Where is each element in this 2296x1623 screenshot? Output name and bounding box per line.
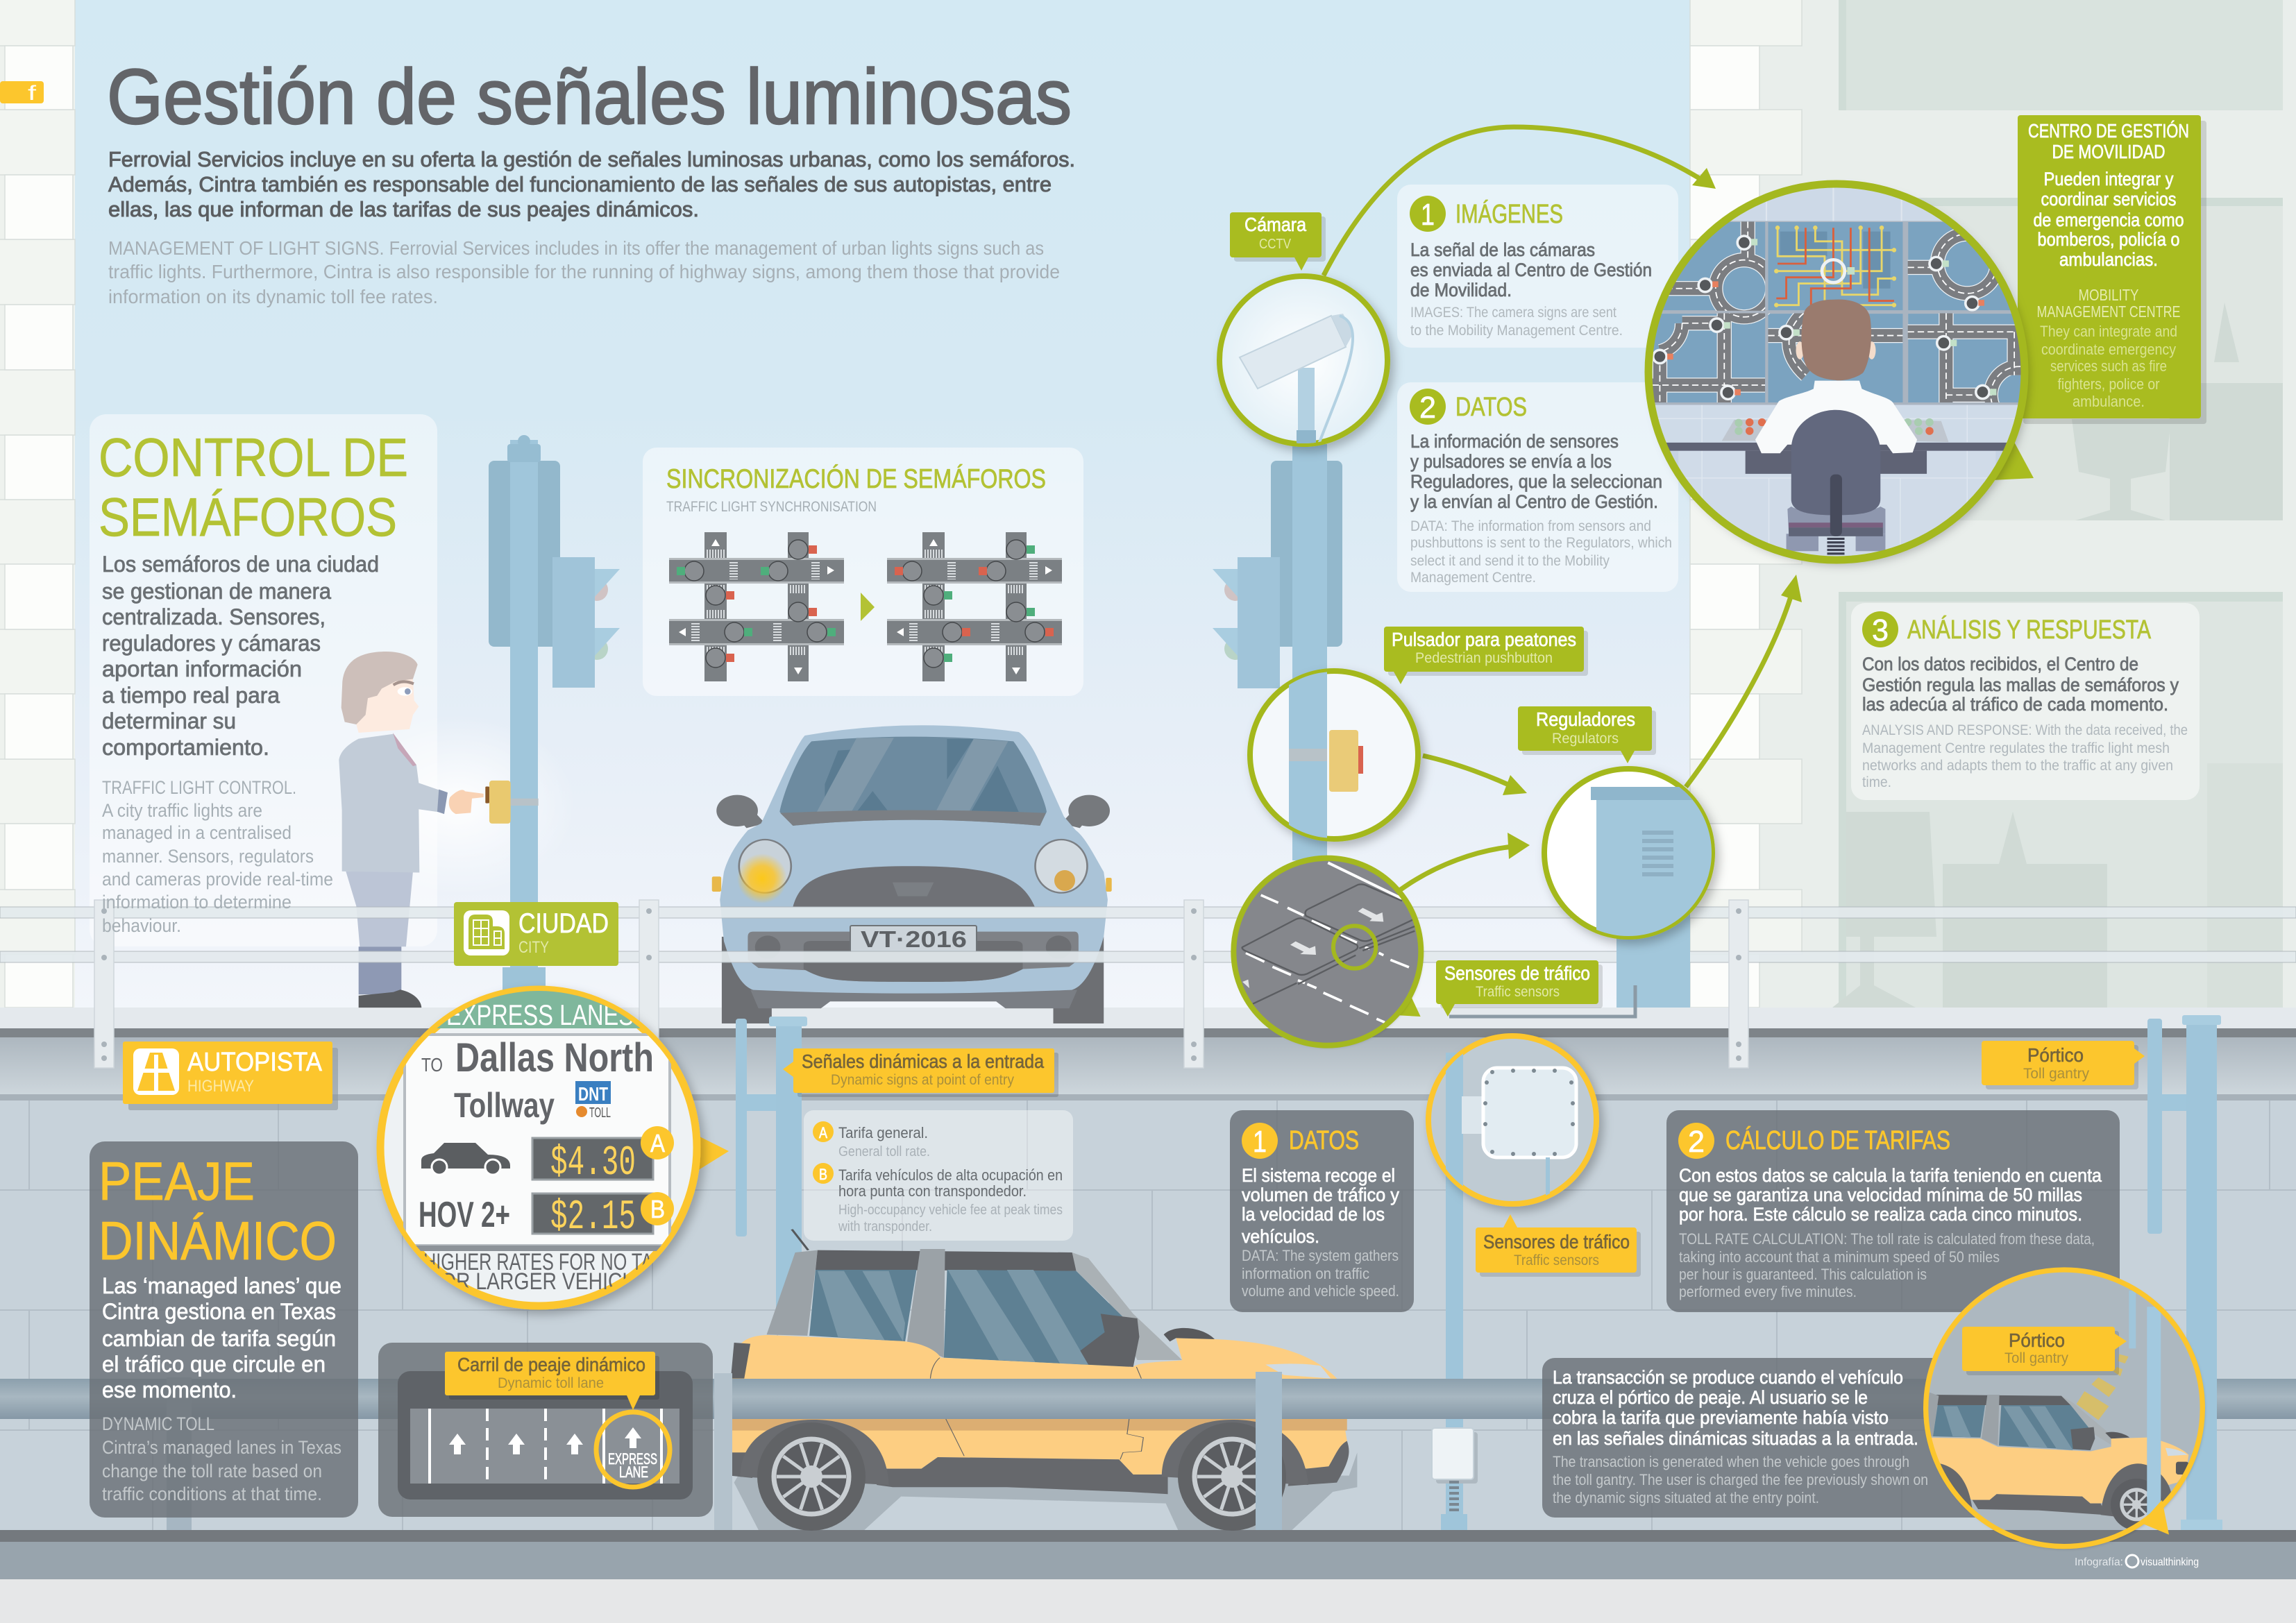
callout: express lane: LANE xyxy=(619,1463,648,1481)
text: control English: manner. Sensors, regulators xyxy=(102,846,314,867)
intro English: information on its dynamic toll fee rates. xyxy=(108,286,438,307)
intro English: traffic lights. Furthermore, Cintra is also responsible for the running of highway signs, among them those that provide xyxy=(108,261,1060,282)
arrow: regulators to centre xyxy=(1686,575,1802,787)
text: análisis Spanish: las adecúa al tráfico de cada momento. xyxy=(1862,694,2168,715)
panel: centro de gestión de movilidad: MANAGEMENT CENTRE xyxy=(2036,303,2181,321)
label: pórtico top: Pórtico xyxy=(2027,1044,2084,1066)
callout: express lane: EXPRESS xyxy=(608,1450,657,1468)
panel: sincronización xyxy=(643,448,1083,696)
panel: carril de peaje dinámico xyxy=(378,1343,713,1517)
label: reguladores: Regulators xyxy=(1552,731,1619,747)
text: cálculo Spanish: por hora. Este cálculo se realiza cada cinco minutos. xyxy=(1679,1204,2082,1225)
text: peaje English: Cintra’s managed lanes in Texas xyxy=(102,1437,341,1458)
callout: road sensors circle xyxy=(1233,858,1421,1046)
text: peaje Spanish: Las ‘managed lanes’ que xyxy=(102,1273,341,1298)
city guard rail xyxy=(0,900,2296,1068)
text: datos highway Spanish: volumen de tráfico y xyxy=(1242,1184,1399,1205)
label: pórtico in circle: Pórtico xyxy=(2009,1329,2065,1351)
label: sensores de tráfico green: Sensores de tráfico xyxy=(1444,962,1590,984)
text: cálculo English xyxy=(1679,1230,2095,1300)
label: pórtico top xyxy=(1982,1041,2145,1089)
text: datos highway English: volume and vehicle speed. xyxy=(1242,1282,1399,1300)
license plate xyxy=(850,926,977,952)
text: transacción English: The transaction is generated when the vehicle goes through xyxy=(1553,1453,1909,1470)
text: peaje Spanish xyxy=(102,1273,341,1402)
panel: 1 datos highway: DATOS xyxy=(1289,1126,1359,1155)
sidewalk and road edge xyxy=(0,1008,2296,1037)
text: peaje English: traffic conditions at that time. xyxy=(102,1484,322,1504)
credit xyxy=(2075,1555,2199,1568)
text: datos Spanish: y pulsadores se envía a los xyxy=(1410,451,1612,472)
panel: 2 datos: DATOS xyxy=(1455,393,1527,422)
text: transacción English: the toll gantry. The user is charged the fee previously shown on xyxy=(1553,1471,1928,1488)
heading: control de semáforos: CONTROL DE xyxy=(99,427,408,488)
operator at desk xyxy=(1755,300,1917,554)
text: cálculo English: per hour is guaranteed. This calculation is xyxy=(1679,1266,1927,1283)
panel: tarifas A B xyxy=(804,1110,1073,1241)
text: datos highway Spanish: vehículos. xyxy=(1242,1226,1319,1247)
number 1 yellow: 1 xyxy=(1253,1125,1267,1159)
callout: pushbutton circle xyxy=(1250,666,1418,847)
text: peaje English: change the toll rate based on xyxy=(102,1461,322,1481)
text: control English xyxy=(102,777,333,936)
text: peaje Spanish: ese momento. xyxy=(102,1377,237,1402)
text: control Spanish xyxy=(102,552,379,760)
panel: centro de gestión de movilidad: fighters, police or xyxy=(2057,375,2160,393)
number 3: 3 xyxy=(1872,613,1889,647)
text: peaje Spanish: Cintra gestiona en Texas xyxy=(102,1299,336,1324)
panel: tarifas A B: Tarifa vehículos de alta ocupación en xyxy=(838,1166,1063,1184)
text: datos Spanish xyxy=(1410,431,1662,512)
panel: centro de gestión de movilidad: ambulancias. xyxy=(2059,249,2158,270)
text: control English: TRAFFIC LIGHT CONTROL. xyxy=(102,777,296,798)
text: análisis English: ANALYSIS AND RESPONSE: With the data received, the xyxy=(1862,722,2188,738)
panel: centro de gestión de movilidad xyxy=(2018,115,2206,424)
callout: dynamic sign lens: $2.15 xyxy=(550,1194,636,1241)
wire from sensors xyxy=(1449,985,1635,1017)
panel: 2 datos xyxy=(1397,382,1678,592)
text: datos English: DATA: The information from sensors and xyxy=(1410,518,1651,534)
marker small B: B xyxy=(819,1166,827,1183)
left brick wall xyxy=(0,0,75,1008)
panel: 3 análisis y respuesta: ANÁLISIS Y RESPUESTA xyxy=(1907,615,2152,645)
panel: 1 datos highway xyxy=(1230,1110,1414,1312)
traffic light right xyxy=(1213,444,1342,860)
number 1 xyxy=(1410,196,1446,232)
road nodes xyxy=(1653,236,1989,399)
text: datos English xyxy=(1410,518,1672,586)
text: transacción English xyxy=(1553,1453,1928,1506)
label: señales dinámicas: Señales dinámicas a la entrada xyxy=(802,1051,1044,1072)
arrow between grids xyxy=(861,593,875,621)
text: datos highway Spanish: la velocidad de los xyxy=(1242,1204,1385,1225)
text: cálculo English: taking into account that a minimum speed of 50 miles xyxy=(1679,1248,2000,1266)
blue car front xyxy=(712,725,1112,1023)
panel: tarifas A B: hora punta con transpondedor. xyxy=(838,1182,1027,1200)
callout: toll gantry circle xyxy=(1923,1269,2214,1554)
panel: centro de gestión de movilidad: MOBILITY xyxy=(2078,286,2139,304)
callout: dynamic sign lens: HIGHER RATES FOR NO TAG xyxy=(423,1249,666,1275)
panel: centro de gestión de movilidad: de emergencia como xyxy=(2034,210,2184,230)
text: control English: A city traffic lights are xyxy=(102,800,262,821)
number 2 yellow: 2 xyxy=(1688,1125,1705,1159)
license plate: VT·2016 xyxy=(861,926,967,952)
background: sky xyxy=(0,0,2296,1020)
callout: dynamic sign lens: OR LARGER VEHICLES xyxy=(441,1268,659,1295)
road grid before xyxy=(669,532,844,681)
text: peaje English: DYNAMIC TOLL xyxy=(102,1413,214,1434)
heading: peaje dinámico: PEAJE xyxy=(99,1150,255,1212)
icon: highway xyxy=(133,1048,179,1095)
heading: peaje dinámico: DINÁMICO xyxy=(99,1210,337,1271)
text: cálculo English: TOLL RATE CALCULATION: The toll rate is calculated from these data, xyxy=(1679,1230,2095,1248)
panel: transacción xyxy=(1542,1358,2021,1518)
heading: peaje dinámico xyxy=(99,1150,337,1271)
text: control Spanish: se gestionan de manera xyxy=(102,579,331,604)
callout: dynamic sign lens: Tollway xyxy=(454,1086,555,1125)
marker B xyxy=(641,1192,674,1225)
label: señales dinámicas: Dynamic signs at point of entry xyxy=(831,1072,1014,1088)
text: imágenes Spanish: de Movilidad. xyxy=(1410,280,1512,300)
text: imágenes Spanish: La señal de las cámaras xyxy=(1410,239,1595,260)
panel: centro de gestión de movilidad: coordinate emergency xyxy=(2041,341,2176,358)
text: análisis English xyxy=(1862,722,2188,790)
text: datos highway English: information on traffic xyxy=(1242,1265,1369,1282)
car wheels xyxy=(757,1422,1286,1531)
label: carril: Dynamic toll lane xyxy=(498,1375,604,1391)
label: pórtico in circle: Toll gantry xyxy=(2004,1350,2068,1366)
panel: centro de gestión de movilidad: They can integrate and xyxy=(2040,323,2177,340)
arrow: camera to centre xyxy=(1324,127,1716,275)
label: sensores de tráfico yellow: Traffic sensors xyxy=(1514,1252,1599,1268)
panel: tarifas A B: Tarifa general. xyxy=(838,1124,928,1141)
text: transacción Spanish: La transacción se produce cuando el vehículo xyxy=(1553,1367,1903,1388)
label: señales dinámicas xyxy=(783,1048,1058,1097)
text: control Spanish: centralizada. Sensores, xyxy=(102,604,326,629)
man pressing button xyxy=(339,652,539,1008)
label: reguladores: Reguladores xyxy=(1536,708,1635,730)
label: cámara xyxy=(1230,212,1326,271)
panel: peaje dinámico xyxy=(90,1141,358,1518)
label: pulsador: Pulsador para peatones xyxy=(1392,629,1576,650)
text: control English: managed in a centralised xyxy=(102,822,292,843)
label: pulsador xyxy=(1384,627,1588,684)
text: cálculo Spanish: Con estos datos se calcula la tarifa teniendo en cuenta xyxy=(1679,1165,2102,1186)
marker small A: A xyxy=(819,1124,827,1141)
callout: dynamic sign lens: HOV 2+ xyxy=(419,1195,510,1235)
label: carril xyxy=(445,1352,659,1410)
monitor screens xyxy=(1650,222,2023,402)
text: peaje English xyxy=(102,1413,341,1504)
text: imágenes English: to the Mobility Management Centre. xyxy=(1410,323,1623,339)
number 2 yellow xyxy=(1678,1123,1714,1159)
intro Spanish: ellas, las que informan de las tarifas de sus peajes dinámicos. xyxy=(108,197,699,221)
text: imágenes English: IMAGES: The camera signs are sent xyxy=(1410,305,1617,321)
callout: dynamic sign lens: TOLL xyxy=(589,1105,611,1121)
text: peaje Spanish: cambian de tarifa según xyxy=(102,1326,336,1351)
label: pórtico in circle xyxy=(1962,1327,2127,1375)
badge: ciudad: CIUDAD xyxy=(518,908,609,939)
badge: autopista xyxy=(123,1042,338,1110)
callout: express lane xyxy=(596,1412,670,1487)
tab: f xyxy=(0,81,44,105)
panel: 2 cálculo de tarifas: CÁLCULO DE TARIFAS xyxy=(1725,1125,1950,1155)
marker small A xyxy=(813,1121,834,1142)
panel: centro de gestión de movilidad: bomberos, policía o xyxy=(2038,229,2179,250)
panel: 1 imágenes xyxy=(1397,185,1678,348)
credit: visualthinking xyxy=(2141,1556,2199,1568)
gantry xyxy=(2147,1015,2222,1530)
callout: dynamic sign lens: TO xyxy=(421,1054,443,1076)
panel: centro de gestión de movilidad: services such as fire xyxy=(2050,357,2167,375)
number 2 xyxy=(1410,389,1446,425)
text: control Spanish: a tiempo real para xyxy=(102,683,280,708)
road grid after xyxy=(887,532,1062,681)
text: control Spanish: determinar su xyxy=(102,708,236,733)
text: datos highway English: DATA: The system gathers xyxy=(1242,1247,1399,1264)
text: control Spanish: comportamiento. xyxy=(102,735,269,760)
label: sensores de tráfico yellow: Sensores de tráfico xyxy=(1483,1231,1630,1252)
intro English: MANAGEMENT OF LIGHT SIGNS. Ferrovial Services includes in its offer the management of urban lights signs such as xyxy=(108,237,1044,259)
text: datos highway Spanish xyxy=(1242,1165,1399,1247)
text: transacción Spanish: en las señales dinámicas situadas a la entrada. xyxy=(1553,1428,1918,1449)
text: datos English: pushbuttons is sent to the Regulators, which xyxy=(1410,535,1672,551)
label: cámara: CCTV xyxy=(1259,237,1292,252)
highway wall xyxy=(0,1037,2296,1531)
panel: centro de gestión de movilidad: ambulance. xyxy=(2073,393,2145,410)
panel text: control de semáforos xyxy=(99,427,408,936)
text: imágenes English xyxy=(1410,305,1623,339)
intro English xyxy=(108,237,1060,307)
callout: dynamic sign lens: $4.30 xyxy=(550,1140,636,1187)
callout: mobility control room xyxy=(1645,184,2048,570)
text: control English: information to determine xyxy=(102,892,292,912)
callout: dynamic sign lens: DNT xyxy=(578,1083,608,1105)
number 1 yellow xyxy=(1242,1123,1278,1159)
text: análisis Spanish xyxy=(1862,654,2179,715)
panel background: control de semáforos xyxy=(90,414,437,946)
text: control English: behaviour. xyxy=(102,915,181,936)
callout: dynamic sign lens xyxy=(375,985,729,1306)
text: datos Spanish: Reguladores, que la seleccionan xyxy=(1410,471,1662,492)
panel: centro de gestión de movilidad: CENTRO DE GESTIÓN xyxy=(2028,120,2189,142)
text: transacción English: the dynamic signs situated at the entry point. xyxy=(1553,1489,1819,1506)
panel: 1 imágenes: IMÁGENES xyxy=(1455,199,1563,229)
callout: regulator circle xyxy=(1544,769,1714,944)
network diagram xyxy=(1776,228,1894,309)
badge: autopista: AUTOPISTA xyxy=(187,1048,323,1077)
text: cálculo Spanish xyxy=(1679,1165,2102,1225)
text: control Spanish: aportan información xyxy=(102,656,302,681)
tab: f: f xyxy=(28,82,37,105)
label: sensores de tráfico green: Traffic sensors xyxy=(1476,984,1560,1000)
text: cálculo Spanish: que se garantiza una velocidad mínima de 50 millas xyxy=(1679,1184,2082,1205)
heading: control de semáforos xyxy=(99,427,408,547)
dynamic sign pole xyxy=(736,1017,807,1331)
marker A xyxy=(641,1126,674,1159)
text: análisis English: time. xyxy=(1862,774,1891,790)
label: sensores de tráfico green xyxy=(1436,960,1603,1017)
number 2: 2 xyxy=(1419,391,1436,425)
marker small B xyxy=(813,1163,834,1184)
panel: sincronización: SINCRONIZACIÓN DE SEMÁFOROS xyxy=(666,464,1046,494)
badge: autopista: HIGHWAY xyxy=(187,1077,254,1096)
heading: control de semáforos: SEMÁFOROS xyxy=(99,486,397,547)
number 3 xyxy=(1862,611,1898,647)
marker A: A xyxy=(650,1129,665,1157)
control console xyxy=(1658,405,2015,545)
intro Spanish: Ferrovial Servicios incluye en su oferta la gestión de señales luminosas urbanas, como los semáforos. xyxy=(108,147,1075,171)
text: transacción Spanish xyxy=(1553,1367,1918,1449)
text: transacción Spanish: cobra la tarifa que previamente había visto xyxy=(1553,1407,1889,1428)
arrow: pushbutton to regulators xyxy=(1423,756,1527,795)
panel: centro de gestión de movilidad: Pueden integrar y xyxy=(2043,169,2174,189)
badge: ciudad xyxy=(454,902,618,966)
icon: car on sign xyxy=(421,1143,510,1175)
text: imágenes Spanish xyxy=(1410,239,1652,300)
text: control English: and cameras provide real-time xyxy=(102,869,333,890)
callout: highway sensor circle xyxy=(1428,1034,1596,1207)
label: cámara: Cámara xyxy=(1244,214,1306,235)
text: datos highway English xyxy=(1242,1247,1399,1300)
callout: dynamic sign lens: EXPRESS LANES xyxy=(446,999,634,1031)
road base xyxy=(0,1530,2296,1623)
traffic light left xyxy=(489,435,620,1008)
badge: ciudad: CITY xyxy=(518,938,549,957)
sensor pole on highway xyxy=(1432,1053,1478,1530)
panel: centro de gestión de movilidad: coordinar servicios xyxy=(2041,189,2177,210)
credit: Infografía: xyxy=(2075,1556,2123,1568)
callout: camera circle xyxy=(1219,276,1387,451)
text: control Spanish: reguladores y cámaras xyxy=(102,631,321,656)
panel: tarifas A B: General toll rate. xyxy=(838,1144,930,1159)
text: transacción Spanish: cruza el pórtico de peaje. Al usuario se le xyxy=(1553,1387,1868,1408)
panel: tarifas A B: High-occupancy vehicle fee at peak times xyxy=(838,1203,1063,1218)
text: análisis English: Management Centre regulates the traffic light mesh xyxy=(1862,740,2170,756)
text: análisis Spanish: Con los datos recibidos, el Centro de xyxy=(1862,654,2138,674)
text: análisis English: networks and adapts them to the traffic at any given xyxy=(1862,758,2173,774)
text: datos English: Management Centre. xyxy=(1410,570,1536,586)
icon: CCTV camera xyxy=(1240,316,1346,389)
label: carril: Carril de peaje dinámico xyxy=(457,1354,645,1375)
label: sensores de tráfico yellow xyxy=(1476,1214,1641,1277)
intro Spanish xyxy=(108,147,1075,221)
text: datos highway Spanish: El sistema recoge el xyxy=(1242,1165,1395,1186)
icon: city building xyxy=(464,910,509,955)
monitor roads xyxy=(1652,221,2021,402)
office silhouettes in windows xyxy=(1832,303,2283,1008)
label: pórtico top: Toll gantry xyxy=(2023,1066,2089,1082)
text: datos English: select it and send it to the Mobility xyxy=(1410,553,1610,569)
marker B: B xyxy=(650,1195,665,1223)
panel: centro de gestión de movilidad: DE MOVILIDAD xyxy=(2052,141,2166,162)
panel: 3 análisis y respuesta xyxy=(1851,603,2200,800)
text: imágenes Spanish: es enviada al Centro de Gestión xyxy=(1410,260,1652,280)
title: Gestión de señales luminosas xyxy=(107,53,1072,140)
arrow: sensors to regulators xyxy=(1401,833,1530,890)
yellow car xyxy=(730,1230,1357,1531)
text: datos Spanish: La información de sensores xyxy=(1410,431,1619,452)
text: análisis Spanish: Gestión regula las mallas de semáforos y xyxy=(1862,674,2179,695)
regulator cabinet below lens xyxy=(1617,902,1690,1008)
label: pulsador: Pedestrian pushbutton xyxy=(1415,650,1553,666)
text: cálculo English: performed every five minutes. xyxy=(1679,1283,1857,1300)
callout: dynamic sign lens: Dallas North xyxy=(455,1035,654,1080)
highway guard rail xyxy=(0,1372,2296,1530)
intro Spanish: Además, Cintra también es responsable del funcionamiento de las señales de sus autopistas, entre xyxy=(108,172,1052,196)
panel: sincronización: TRAFFIC LIGHT SYNCHRONISATION xyxy=(666,499,877,515)
panel: 2 cálculo de tarifas xyxy=(1666,1110,2120,1312)
number 1: 1 xyxy=(1421,198,1435,232)
panel: tarifas A B: with transponder. xyxy=(838,1219,932,1234)
text: datos Spanish: y la envían al Centro de Gestión. xyxy=(1410,491,1658,512)
right building xyxy=(1690,0,2296,1020)
text: peaje Spanish: el tráfico que circule en xyxy=(102,1352,326,1377)
label: reguladores xyxy=(1518,706,1656,763)
text: control Spanish: Los semáforos de una ciudad xyxy=(102,552,379,577)
glow around button xyxy=(340,715,576,895)
